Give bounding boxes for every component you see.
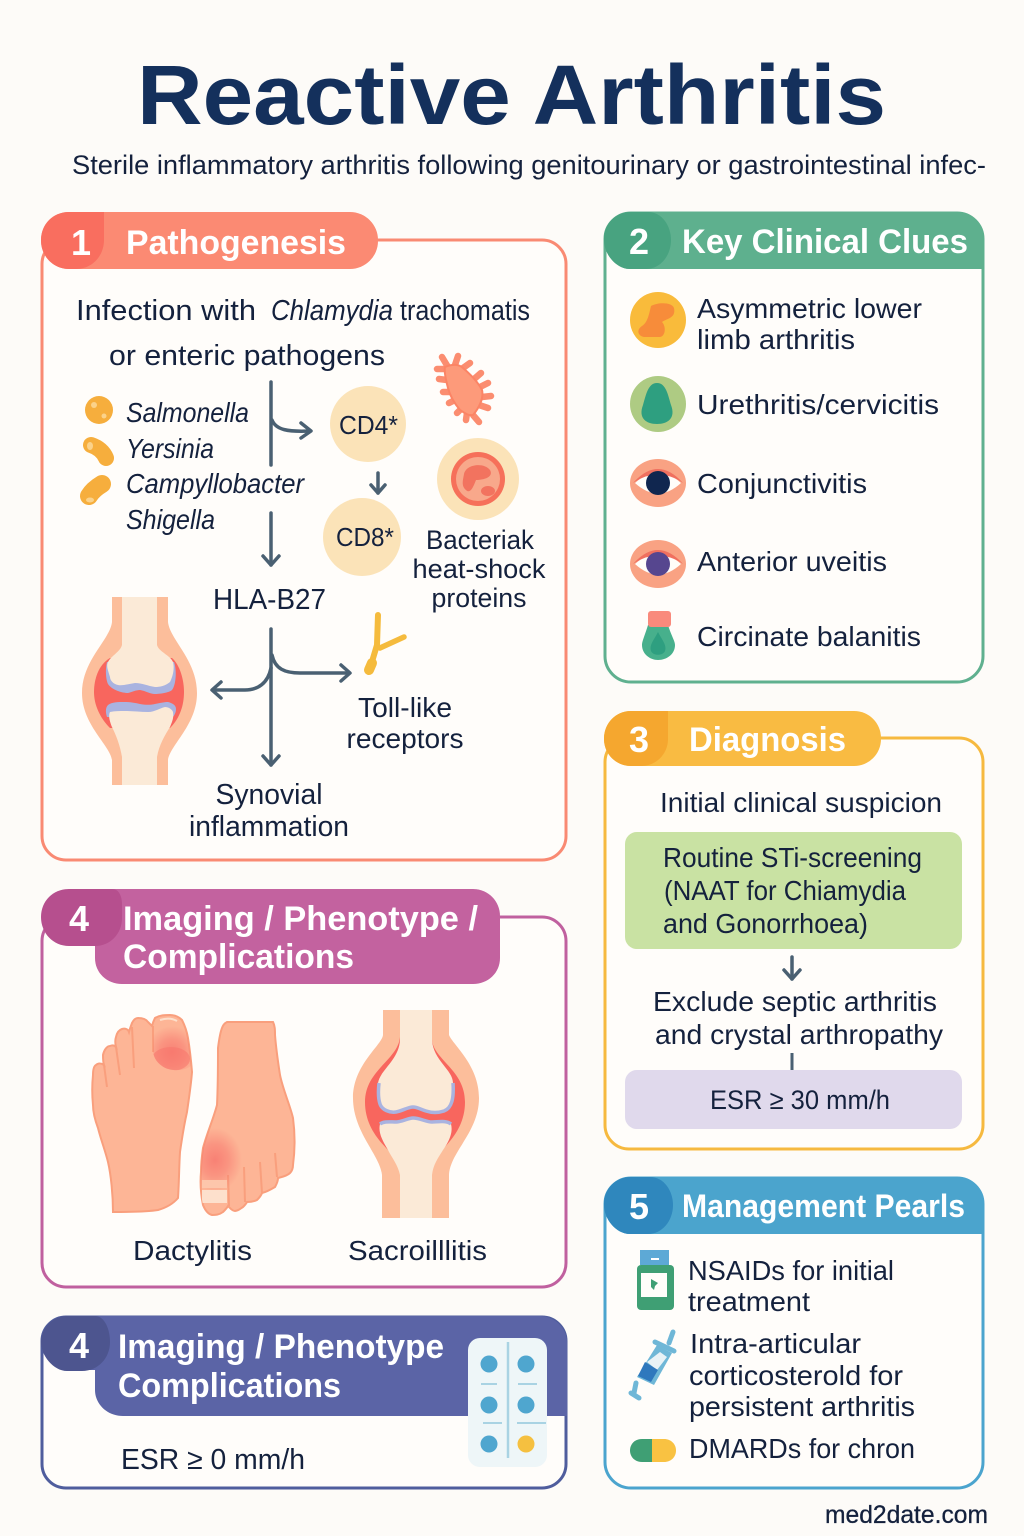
item: NSAIDs: treatment xyxy=(688,1286,810,1317)
clue: anterior uveitis xyxy=(630,540,887,588)
box: routine STI screening: Routine STi-screening xyxy=(663,842,922,873)
arrow: bacteria to CD4 xyxy=(271,382,311,465)
text: infection intro: trachomatis xyxy=(400,295,530,327)
subtitle: Sterile inflammatory arthritis following genitourinary or gastrointestinal infec- xyxy=(72,150,986,180)
box: routine STI screening: (NAAT for Chiamydia xyxy=(664,875,906,906)
label: sacroiliitis: Sacroilllitis xyxy=(348,1235,487,1266)
text: HLA-B27: HLA-B27 xyxy=(213,584,326,616)
text: bacteria names xyxy=(126,397,306,535)
header: imaging phenotype: Imaging / Phenotype xyxy=(118,1328,444,1366)
icon: toll-like receptor xyxy=(369,615,404,670)
clue: conjunctivitis xyxy=(630,459,867,507)
header: pathogenesis: 1 xyxy=(71,222,91,263)
header: management pearls xyxy=(604,1177,984,1234)
text: infection intro xyxy=(76,295,530,372)
arrow: screening to exclude xyxy=(784,957,800,979)
panel: diagnosis xyxy=(604,711,983,1149)
panel: management pearls xyxy=(604,1177,984,1488)
box: routine STI screening: and Gonorrhoea) xyxy=(663,908,868,939)
box: routine STI screening xyxy=(625,832,962,949)
text: infection intro: Infection with xyxy=(76,295,256,327)
item: intra-articular corticosteroid: persistent arthritis xyxy=(689,1391,915,1422)
header: imaging phenotype complications: Imaging / Phenotype / xyxy=(123,900,479,938)
arrow: bacteria to HLA-B27 xyxy=(263,513,279,565)
text: synovial inflammation xyxy=(189,779,349,843)
header: key clinical clues xyxy=(604,212,984,269)
icon: bacterium xyxy=(437,356,491,422)
text: initial clinical suspicion: Initial clinical suspicion xyxy=(660,787,942,818)
text: infection intro: Chlamydia xyxy=(271,295,393,327)
text: ESR value: ESR ≥ 0 mm/h xyxy=(121,1444,305,1476)
text: bacterial heat-shock proteins: proteins xyxy=(432,583,526,613)
clue: urethritis/cervicitis xyxy=(630,376,939,432)
header: diagnosis xyxy=(604,711,881,766)
text: bacterial heat-shock proteins: Bacteriak xyxy=(426,525,534,555)
panel: key clinical clues xyxy=(604,212,984,682)
CD8 circle xyxy=(323,498,401,576)
footer: source: med2date.com xyxy=(825,1501,988,1529)
clue: urethritis/cervicitis: Urethritis/cervicitis xyxy=(697,389,939,420)
CD8 circle: CD8* xyxy=(336,522,394,552)
clue: circinate balanitis xyxy=(642,611,921,660)
illustration: inflamed joint xyxy=(82,597,197,785)
header: pathogenesis xyxy=(41,212,378,269)
illustration: left foot xyxy=(92,1015,198,1212)
text: synovial inflammation: Synovial xyxy=(216,779,322,811)
arrow: HLA-B27 branching xyxy=(212,629,350,765)
text: exclude septic arthritis xyxy=(653,986,943,1050)
text: bacteria names: Campyllobacter xyxy=(126,468,306,499)
icon: heat-shock protein cell xyxy=(437,438,519,520)
item: intra-articular corticosteroid: Intra-articular xyxy=(690,1328,861,1359)
header: imaging phenotype complications xyxy=(41,889,500,984)
header: diagnosis: Diagnosis xyxy=(689,721,846,759)
text: bacteria names: Salmonella xyxy=(126,397,249,428)
CD4 circle xyxy=(330,386,406,462)
clue: anterior uveitis: Anterior uveitis xyxy=(697,546,887,577)
illustration: right foot xyxy=(188,1022,294,1215)
icons: enteric bacteria xyxy=(85,396,113,502)
label: dactylitis: Dactylitis xyxy=(133,1235,252,1266)
title: Reactive Arthritis xyxy=(137,48,886,142)
clue: conjunctivitis: Conjunctivitis xyxy=(697,468,867,499)
box: ESR threshold xyxy=(625,1070,962,1129)
text: toll-like receptors: Toll-like xyxy=(358,692,452,723)
header: imaging phenotype: 4 xyxy=(69,1325,89,1366)
icon: pill blister pack xyxy=(468,1338,547,1467)
text: bacterial heat-shock proteins xyxy=(412,525,546,613)
panel: pathogenesis xyxy=(41,212,566,860)
clue: asymmetric lower limb arthritis: Asymmetric lower xyxy=(697,293,922,324)
arrow: CD4 to CD8 xyxy=(371,473,385,493)
header: key clinical clues: 2 xyxy=(629,221,649,262)
text: exclude septic arthritis: and crystal arthropathy xyxy=(655,1019,943,1050)
header: imaging phenotype complications: Complications xyxy=(123,938,354,976)
text: infection intro: or enteric pathogens xyxy=(109,340,385,372)
header: imaging phenotype complications: 4 xyxy=(69,898,89,939)
text: toll-like receptors: receptors xyxy=(346,723,464,754)
header: diagnosis: 3 xyxy=(629,719,649,760)
text: exclude septic arthritis: Exclude septic arthritis xyxy=(653,986,937,1017)
illustration: sacroiliac joint xyxy=(353,1010,479,1218)
panel: imaging phenotype complications xyxy=(41,889,566,1287)
text: synovial inflammation: inflammation xyxy=(189,811,349,843)
text: bacteria names: Yersinia xyxy=(126,433,214,464)
header: management pearls: 5 xyxy=(629,1186,649,1227)
clue: circinate balanitis: Circinate balanitis xyxy=(697,621,921,652)
item: NSAIDs xyxy=(637,1250,894,1317)
item: intra-articular corticosteroid: corticosterold for xyxy=(689,1360,903,1391)
header: management pearls: Management Pearls xyxy=(682,1188,965,1224)
item: DMARDs: DMARDs for chron xyxy=(689,1433,915,1464)
text: bacterial heat-shock proteins: heat-shock xyxy=(412,554,546,584)
clue: asymmetric lower limb arthritis xyxy=(630,292,922,355)
header: imaging phenotype: Complications xyxy=(118,1367,341,1405)
header: pathogenesis: Pathogenesis xyxy=(126,224,346,262)
header: imaging phenotype xyxy=(41,1316,567,1416)
CD4 circle: CD4* xyxy=(339,410,398,440)
item: intra-articular corticosteroid xyxy=(631,1328,915,1422)
header: key clinical clues: Key Clinical Clues xyxy=(682,223,968,261)
text: bacteria names: Shigella xyxy=(126,504,215,535)
box: ESR threshold: ESR ≥ 30 mm/h xyxy=(710,1085,890,1115)
text: toll-like receptors xyxy=(346,692,464,754)
clue: asymmetric lower limb arthritis: limb arthritis xyxy=(697,324,855,355)
panel: imaging phenotype ESR xyxy=(41,1316,567,1488)
item: NSAIDs: NSAIDs for initial xyxy=(688,1255,894,1286)
